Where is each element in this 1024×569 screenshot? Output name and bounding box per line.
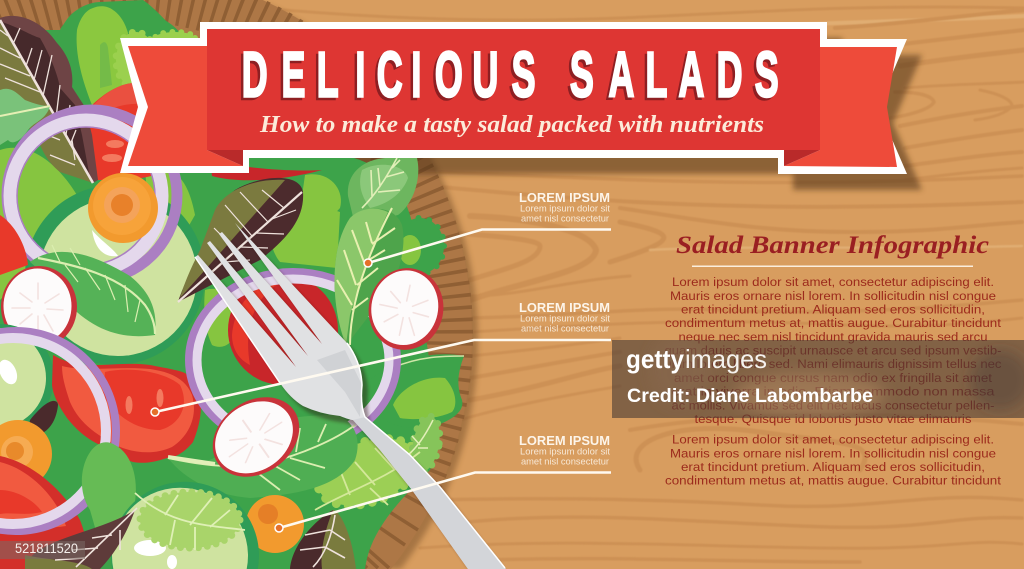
- cucumber: bottom: [111, 482, 259, 569]
- watermark credit: Credit: Diane Labombarbe: [627, 385, 873, 407]
- body text: Lorem ipsum dolor sit amet, consectetur adipiscing elit.: [672, 275, 994, 289]
- label 1: Lorem ipsum dolor sit: [520, 204, 610, 214]
- fork body: [195, 223, 506, 569]
- banner main: [207, 29, 820, 150]
- label 2: amet nisl consectetur: [521, 324, 609, 334]
- leaf: arugula right: [362, 354, 464, 428]
- carrot: left: [0, 420, 52, 488]
- fork handle shade: [353, 417, 506, 569]
- tomato: lower-left: [0, 456, 86, 569]
- watermark id: [0, 541, 85, 559]
- body text: [664, 275, 1002, 488]
- body text: neque nec sem nisl tincidunt gravida mauris sed arcu: [678, 330, 988, 344]
- radish: upper left: [1, 266, 77, 348]
- leaf: lime bottom: [82, 442, 136, 545]
- label 3: amet nisl consectetur: [521, 456, 609, 468]
- watermark id: 521811520: [15, 541, 78, 556]
- watermark logo: getty: [626, 344, 684, 374]
- label 3: LOREM IPSUM: [519, 434, 610, 448]
- right tail: [784, 47, 897, 167]
- body text: erat tincidunt pretium. Aliquam sed eros sollicitudin,: [681, 302, 985, 316]
- leaf: small pale green: [0, 89, 50, 145]
- body text: quam dauis ac suscipit urnausce et arcu sed ipsum vestib-: [664, 344, 1002, 358]
- fork highlights: [195, 257, 505, 568]
- label 2: LOREM IPSUM: [519, 301, 610, 315]
- leaf: upper lettuce right: [348, 158, 418, 225]
- body text: amet orci congue cursus nam odio ex fringilla sit amet: [674, 371, 993, 385]
- callout line 3: [275, 472, 611, 532]
- banner title shadow: DELICIOUS SALADS: [239, 41, 776, 113]
- carrot: upper: [88, 173, 158, 243]
- body text: tesque. Quisque id lobortis justo vitae elimauris: [694, 412, 972, 426]
- carrot: bottom: [246, 495, 304, 553]
- leaf: lime left: [0, 148, 82, 300]
- banner white border: [120, 22, 907, 174]
- body text: condimentum metus at, mattis augue. Curabitur tincidunt: [665, 474, 1002, 488]
- leaf: dark red bottom-left: [25, 508, 137, 569]
- fork: [195, 223, 506, 569]
- sub heading: Salad Banner Infographic: [676, 232, 989, 259]
- body text: Lorem ipsum dolor sit amet, consectetur adipiscing elit.: [672, 432, 994, 446]
- body text: ulum lorem libero sed. Nami elimauris dignissim tellus nec: [664, 357, 1002, 371]
- leaf: lime mid: [145, 168, 341, 347]
- body text: condimentum metus at, mattis augue. Curabitur tincidunt: [665, 316, 1002, 330]
- watermark logo: images: [685, 344, 767, 374]
- label 2: [519, 301, 610, 334]
- lettuce base: [0, 9, 436, 569]
- body text: erat tincidunt pretium. Aliquam sed eros sollicitudin,: [681, 460, 985, 474]
- leaf: green under fork: [168, 415, 358, 498]
- leaf: lime lettuce bottom-right: [309, 414, 444, 518]
- banner title: DELICIOUS SALADS: [242, 39, 779, 110]
- leaf: bright green over cucumber: [30, 245, 156, 336]
- left tail: [128, 46, 243, 166]
- leaf: lettuce with callout point: [334, 208, 403, 345]
- banner folds: [207, 150, 820, 166]
- heading rule: [692, 266, 973, 267]
- callout line 2: [151, 340, 611, 416]
- label 3: Lorem ipsum dolor sit: [520, 446, 610, 458]
- banner subtitle: How to make a tasty salad packed with nutrients: [259, 112, 764, 138]
- radish: right: [361, 261, 451, 357]
- tomato: behind banner: [89, 83, 322, 180]
- salad: [0, 0, 506, 569]
- wooden plate: [0, 0, 478, 569]
- onion ring: upper: [7, 110, 177, 280]
- watermark logo: [626, 344, 767, 374]
- leaf: top green: [57, 0, 195, 120]
- label 3: [519, 434, 610, 468]
- onion ring: lower-left: [0, 331, 116, 531]
- wood grain: [230, 6, 1024, 562]
- label 1: [519, 191, 610, 224]
- leaf: upper right green scallop: [396, 218, 444, 274]
- leaf: dark red bottom: [290, 510, 356, 569]
- leaf: dark red top-left: [0, 16, 98, 183]
- body text: ac mollis. Vivamus sed elit nec lacus consectetur pellen-: [672, 398, 994, 412]
- body text: Mauris eros ornare nisl lorem. In sollicitudin nisl congue: [670, 289, 996, 303]
- watermark band: [612, 334, 1024, 418]
- fork shadow: [201, 230, 504, 569]
- banner shadow: [135, 38, 922, 190]
- leaf: dark left: [28, 401, 58, 435]
- tomato: center: [228, 275, 338, 385]
- cucumber: left: [0, 324, 54, 432]
- banner: [120, 22, 907, 174]
- leaf: dark red center: [178, 178, 303, 302]
- fork shading: [317, 350, 362, 417]
- callout line 1: [364, 230, 611, 267]
- leaf: frilly on cucumber: [135, 492, 245, 550]
- label 1: amet nisl consectetur: [521, 214, 609, 224]
- radish: center: [197, 381, 315, 493]
- tomato: center-left: [52, 355, 201, 463]
- tomato: far left: [0, 215, 28, 275]
- onion ring: center: [189, 272, 397, 448]
- body text: Mauris eros ornare nisl lorem. In sollicitudin nisl congue: [670, 446, 996, 460]
- body text: erat in viverra in odio. Etiam commodo non massa: [672, 384, 995, 398]
- label 2: Lorem ipsum dolor sit: [520, 314, 610, 324]
- cucumber: upper: [25, 185, 205, 365]
- label 1: LOREM IPSUM: [519, 191, 610, 205]
